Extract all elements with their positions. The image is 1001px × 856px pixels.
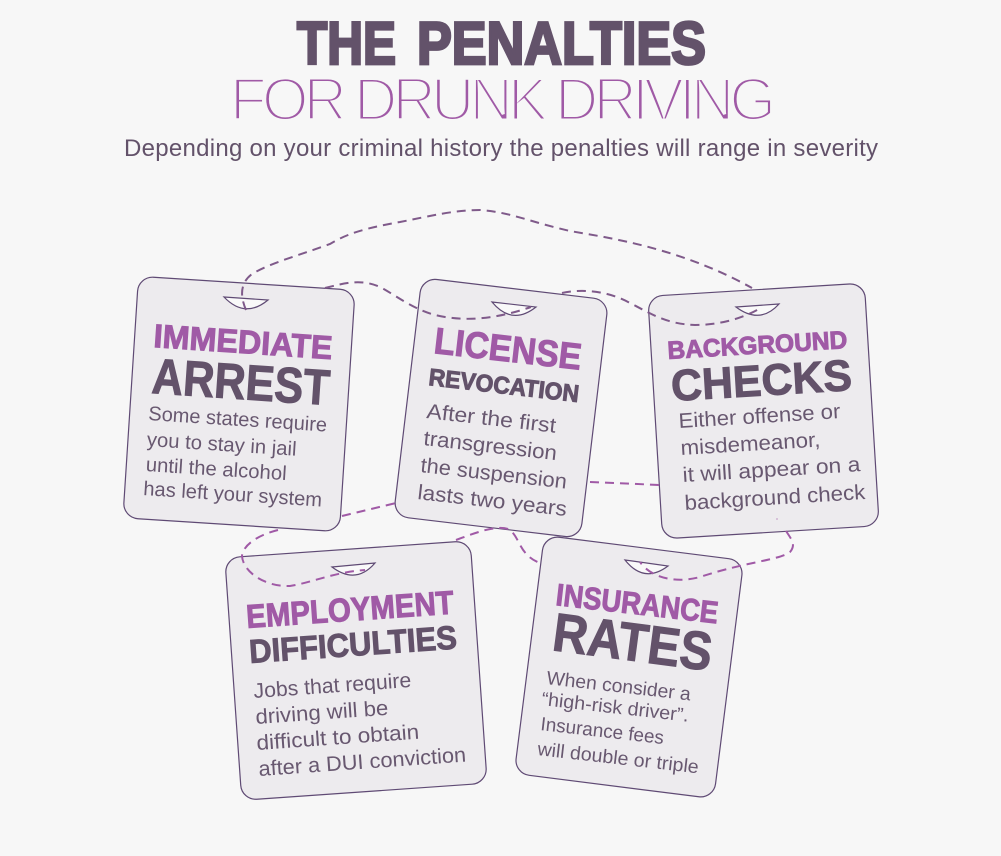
- heading: insurance: INSURANCE: [554, 577, 720, 630]
- body text: “high-risk driver”.: [540, 689, 690, 727]
- body text: lasts two years: [416, 481, 568, 521]
- body text: When consider a: [545, 668, 692, 705]
- body text: driving will be: [255, 697, 389, 729]
- body text: [535, 668, 700, 778]
- dashed string: lower: [242, 482, 793, 586]
- card: background checks: [648, 283, 879, 539]
- heading: license: LICENSE: [432, 320, 584, 378]
- body text: you to stay in jail: [146, 429, 297, 461]
- heading: immediate: IMMEDIATE: [153, 317, 334, 366]
- body text: misdemeanor,: [680, 428, 821, 460]
- heading: revocation: REVOCATION: [427, 364, 580, 408]
- body text: it will appear on a: [682, 453, 861, 487]
- body text: transgression: [422, 427, 558, 465]
- body text: has left your system: [143, 478, 323, 512]
- body text: [416, 400, 568, 521]
- heading: difficulties: DIFFICULTIES: [248, 619, 458, 670]
- body text: Insurance fees: [539, 714, 665, 749]
- dashed string: upper: [242, 210, 762, 325]
- subtitle: Depending on your criminal history the penalties will range in severity: [124, 135, 878, 162]
- body text: Either offense or: [678, 400, 841, 433]
- body text: [143, 403, 328, 512]
- body text: until the alcohol: [145, 454, 287, 485]
- body text: after a DUI conviction: [258, 744, 467, 781]
- card: employment difficulties: [225, 541, 487, 800]
- title: PENALTIES: [417, 10, 706, 77]
- body text: background check: [684, 481, 866, 515]
- title: [230, 10, 776, 133]
- body text: [253, 669, 467, 781]
- heading: arrest: ARREST: [150, 348, 332, 416]
- heading: checks: CHECKS: [670, 351, 853, 411]
- heading: rates: RATES: [549, 602, 716, 683]
- body text: difficult to obtain: [256, 721, 420, 755]
- card: license revocation: [393, 278, 609, 538]
- card: immediate arrest: [123, 276, 355, 532]
- body text: After the first: [425, 400, 557, 438]
- card: insurance rates: [514, 535, 744, 799]
- body text: Jobs that require: [253, 669, 412, 703]
- body text: the suspension: [419, 454, 568, 494]
- heading: employment: EMPLOYMENT: [245, 584, 455, 635]
- body text: [678, 400, 866, 515]
- heading: background: BACKGROUND: [667, 326, 848, 365]
- title: FOR DRUNK DRIVING: [230, 66, 776, 133]
- title: THE: [297, 10, 396, 77]
- body text: Some states require: [148, 403, 328, 437]
- body text: will double or triple: [535, 739, 700, 778]
